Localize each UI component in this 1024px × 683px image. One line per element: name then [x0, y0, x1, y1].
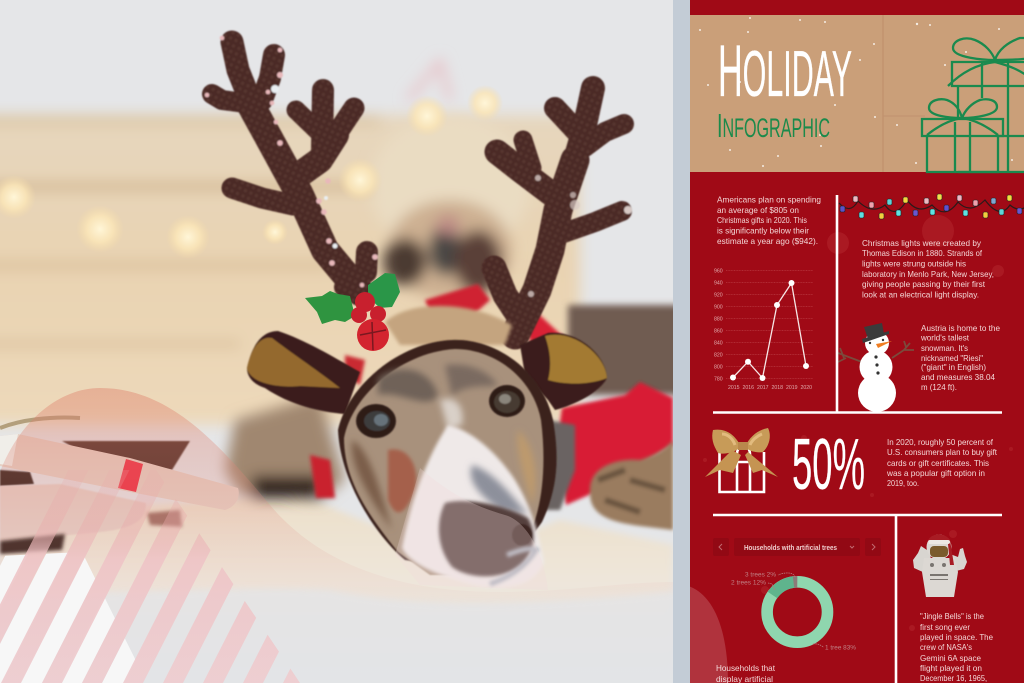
line chart: spending estimates	[714, 268, 813, 391]
line chart: spending estimates: 2016	[742, 385, 754, 391]
line chart: spending estimates: 800	[714, 364, 723, 370]
chart selector controls	[713, 538, 881, 556]
text: Jingle Bells fact	[920, 612, 993, 683]
text: snowman fact: world's tallest	[920, 334, 970, 342]
text: holiday spending: is significantly below their	[717, 226, 809, 236]
heading: Holiday: HOLIDAY	[718, 31, 852, 112]
text: Jingle Bells fact: crew of NASA's	[920, 643, 972, 652]
red sweater	[310, 284, 673, 505]
right ear	[520, 333, 607, 410]
text: Christmas lights fact: lights were strung outside his	[862, 260, 966, 268]
text: snowman fact: Austria is home to the	[921, 324, 1000, 333]
donut chart: artificial trees: 2 trees 12%	[731, 580, 766, 586]
text: snowman fact: ("giant" in English)	[921, 363, 986, 372]
text: Christmas lights fact	[862, 239, 994, 300]
text: Christmas lights fact: look at an electrical light display.	[862, 290, 979, 300]
text: Jingle Bells fact: "Jingle Bells" is the	[920, 612, 984, 621]
text: gift card fact: In 2020, roughly 50 percent of	[887, 438, 994, 447]
box and scrolls	[0, 417, 239, 554]
icon: gift with gold bow	[705, 428, 778, 492]
donut chart: artificial trees	[731, 572, 856, 652]
line chart: spending estimates: 840	[714, 340, 723, 346]
text: gift card fact: was a popular gift option in	[886, 469, 985, 478]
text: holiday spending	[717, 196, 821, 246]
line chart: spending estimates: 860	[714, 328, 723, 334]
text: gift card fact: U.S. consumers plan to buy gift	[887, 448, 998, 457]
line chart: spending estimates: 2019	[786, 385, 798, 391]
holly leaves	[305, 273, 400, 324]
blurred wreath background	[370, 62, 530, 300]
white muzzle	[402, 425, 544, 588]
heading: Infographic: INFOGRAPHIC	[717, 107, 830, 144]
icon: stacked gift boxes	[922, 38, 1024, 172]
text: gift card fact: 2019, too.	[887, 479, 919, 488]
jingle bell and berries	[351, 292, 389, 351]
blurred brown shape behind ear	[225, 395, 345, 500]
text: Jingle Bells fact: flight played it on	[920, 664, 982, 673]
text: Christmas lights fact: giving people passing by their first	[862, 280, 986, 289]
nose	[439, 501, 533, 576]
line chart: spending estimates: 940	[714, 280, 723, 286]
text: Jingle Bells fact: played in space. The	[920, 633, 993, 642]
line chart: spending estimates: 2018	[772, 385, 783, 391]
translucent wave over muzzle	[396, 468, 538, 586]
right antler	[494, 88, 632, 335]
translucent wave over gray strip and red column	[673, 584, 728, 683]
line chart: spending estimates: 820	[714, 352, 723, 358]
bed blanket	[0, 496, 673, 602]
panel: red infographic column	[673, 0, 1024, 683]
blurred wooden wall	[0, 115, 580, 425]
text: snowman fact: snowman. It's	[921, 344, 968, 353]
grey collar shape	[540, 420, 575, 510]
line chart: spending estimates: 2017	[757, 385, 769, 391]
text: holiday spending: Christmas gifts in 2020. This	[717, 216, 807, 225]
pink diagonal stripes	[0, 470, 300, 683]
bokeh lights	[0, 85, 503, 259]
left ear	[247, 331, 360, 414]
text: gift card fact: cards or gift certificates. This	[887, 459, 989, 468]
text: Christmas lights fact: Thomas Edison in 1880. Strands of	[862, 249, 983, 258]
text: Jingle Bells fact: Gemini 6A space	[920, 654, 981, 663]
text: Christmas lights fact: laboratory in Menlo Park, New Jersey,	[862, 270, 994, 279]
text: snowman fact: and measures 38.04	[921, 373, 995, 382]
gray-blue divider strip	[673, 0, 690, 683]
panel: dog photograph	[0, 0, 690, 683]
line chart: spending estimates: 920	[714, 292, 723, 298]
faint snow bokeh	[703, 215, 1013, 631]
line chart: spending estimates: 2020	[800, 385, 812, 391]
line chart: spending estimates: 780	[714, 376, 723, 382]
donut chart: artificial trees: 1 tree 83%	[825, 644, 856, 652]
donut chart: artificial trees: 3 trees 2%	[745, 572, 776, 578]
icon: astronaut in Santa hat	[913, 534, 967, 597]
text: holiday spending: estimate a year ago ($942).	[717, 237, 818, 246]
dog eye: left	[356, 404, 396, 438]
gray-white wave over blanket	[106, 590, 673, 621]
text: gift card fact	[886, 438, 998, 488]
icon: snowman	[838, 323, 914, 412]
text: households display: Households that	[716, 664, 776, 673]
chart selector controls: Households with artificial trees	[744, 545, 837, 552]
text: holiday spending: an average of $805 on	[717, 206, 799, 215]
text: Jingle Bells fact: December 16, 1965,	[920, 674, 987, 683]
fur headband	[385, 306, 512, 345]
dog head	[338, 340, 557, 588]
line chart: spending estimates: 900	[714, 304, 723, 310]
icon: string of Christmas lights	[839, 194, 1024, 219]
paw	[590, 440, 673, 530]
translucent pink wave overlay	[0, 388, 356, 568]
text: households display	[716, 664, 776, 683]
text: Christmas lights fact: Christmas lights were created by	[862, 239, 982, 248]
line chart: spending estimates: 880	[714, 316, 723, 322]
blurred dark furniture	[568, 305, 688, 395]
text: holiday spending: Americans plan on spending	[717, 196, 821, 204]
white diagonal stripes	[0, 552, 135, 683]
header band: kraft paper	[690, 15, 1024, 683]
text: snowman fact: m (124 ft).	[921, 383, 957, 392]
text: Jingle Bells fact: first song ever	[920, 623, 970, 632]
line chart: spending estimates: 2015	[728, 385, 740, 391]
statistic: 50%: 50%	[792, 425, 865, 505]
line chart: spending estimates: 960	[714, 268, 723, 274]
text: snowman fact: nicknamed "Riesi"	[921, 354, 983, 363]
left antler	[205, 36, 378, 292]
text: snowman fact	[920, 324, 1000, 392]
dog eye: right	[489, 385, 525, 417]
